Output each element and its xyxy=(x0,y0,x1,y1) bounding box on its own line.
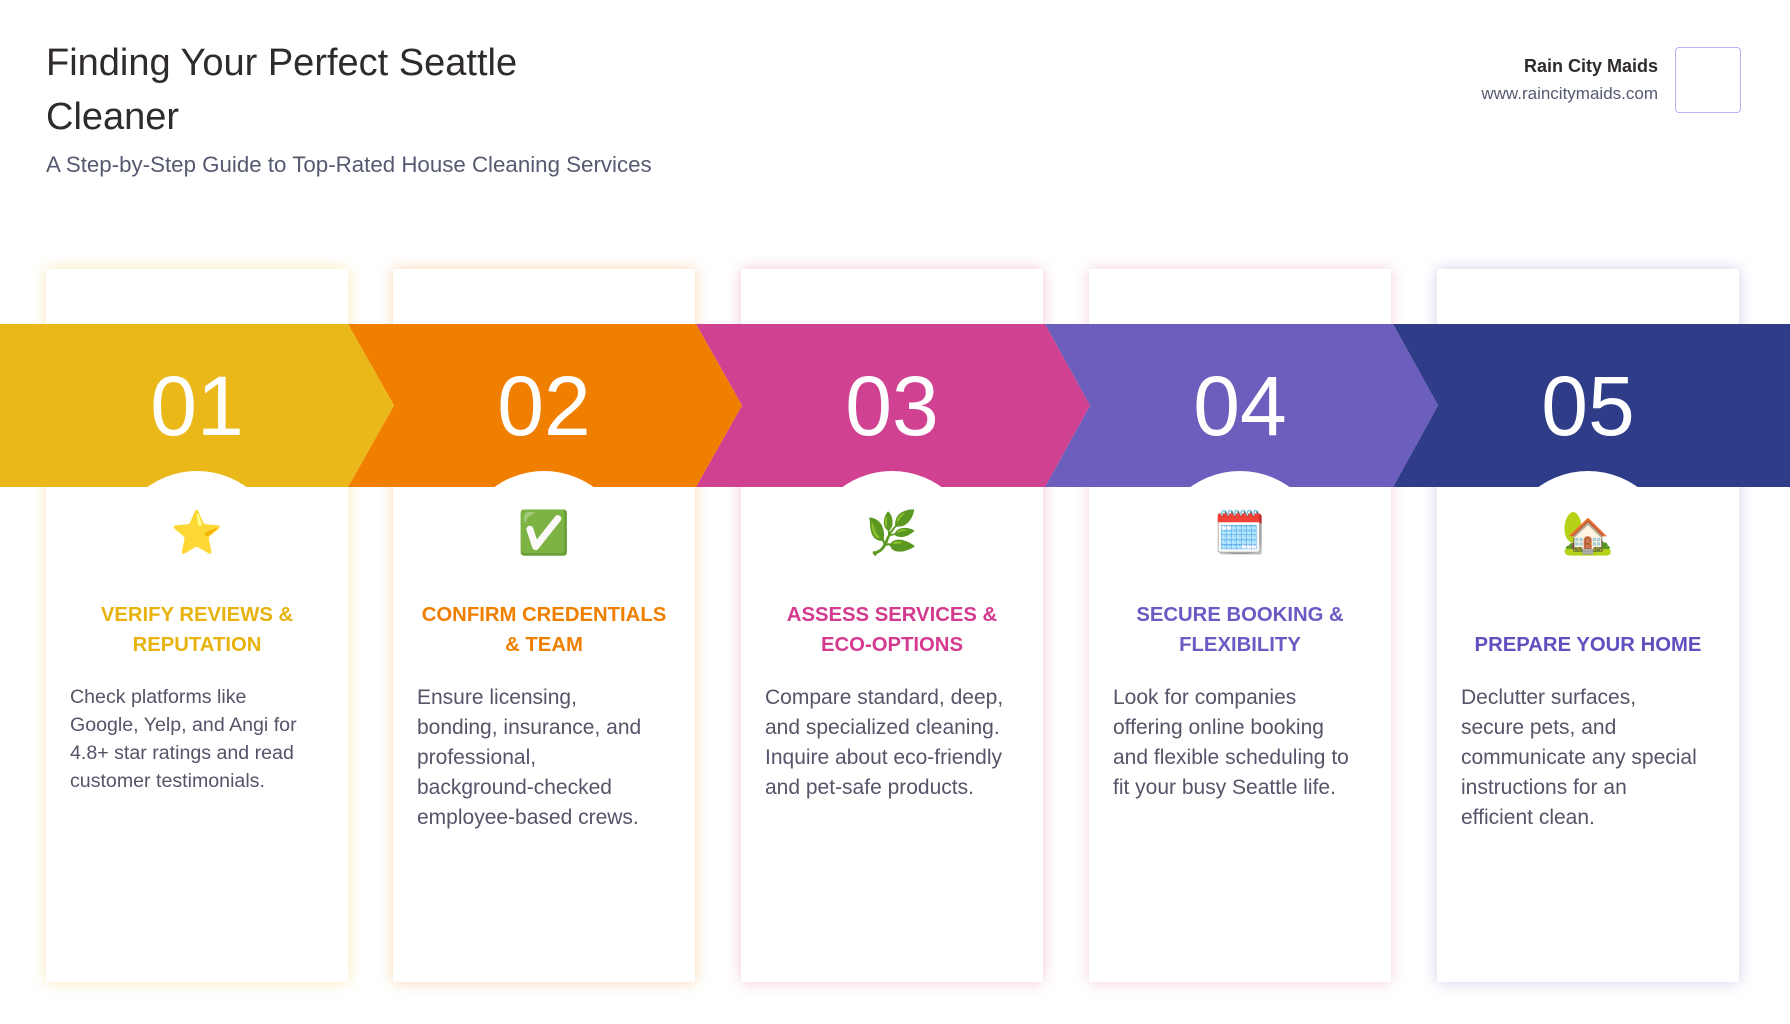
heading 3: ECO-OPTIONS xyxy=(821,634,963,656)
brand url: www.raincitymaids.com xyxy=(1481,84,1658,103)
brand name: Rain City Maids xyxy=(1524,56,1658,76)
title xyxy=(46,42,517,138)
text 4 xyxy=(1113,686,1349,799)
card 3 xyxy=(741,269,1043,982)
number 01: 01 xyxy=(150,359,244,453)
heading 4: FLEXIBILITY xyxy=(1179,634,1301,656)
chevron band xyxy=(0,324,1790,487)
logo box xyxy=(1675,47,1741,113)
text 5: communicate any special xyxy=(1461,746,1697,769)
text 5 xyxy=(1461,686,1697,829)
card 1 xyxy=(46,269,348,982)
heading 4: SECURE BOOKING & xyxy=(1136,604,1344,626)
heading 2 xyxy=(422,604,666,656)
text 3: Inquire about eco-friendly xyxy=(765,746,1002,769)
icon: calendar: 🗓️ xyxy=(1214,509,1266,558)
title: Finding Your Perfect Seattle xyxy=(46,42,517,84)
text 2 xyxy=(417,686,641,829)
text 1 xyxy=(70,686,297,792)
heading 1: VERIFY REVIEWS & xyxy=(101,604,293,626)
heading 5: PREPARE YOUR HOME xyxy=(1475,634,1701,656)
text 2: bonding, insurance, and xyxy=(417,716,641,739)
number 03: 03 xyxy=(845,359,939,453)
icon: house: 🏡 xyxy=(1562,509,1614,558)
text 2: background-checked xyxy=(417,776,612,799)
subtitle: A Step-by-Step Guide to Top-Rated House Cleaning Services xyxy=(46,152,652,177)
brand block xyxy=(1481,47,1741,113)
heading 4 xyxy=(1136,604,1344,656)
text 2: employee-based crews. xyxy=(417,806,639,829)
text 5: secure pets, and xyxy=(1461,716,1616,739)
text 1: Check platforms like xyxy=(70,686,246,708)
text 4: Look for companies xyxy=(1113,686,1296,709)
text 2: professional, xyxy=(417,746,536,769)
text 4: offering online booking xyxy=(1113,716,1324,739)
heading 3: ASSESS SERVICES & xyxy=(787,604,997,626)
card 4 xyxy=(1089,269,1391,982)
heading 2: & TEAM xyxy=(505,634,583,656)
text 3: and pet-safe products. xyxy=(765,776,974,799)
heading 3 xyxy=(787,604,997,656)
icon: check: ✅ xyxy=(518,509,570,558)
number 04: 04 xyxy=(1193,359,1287,453)
text 1: Google, Yelp, and Angi for xyxy=(70,714,297,736)
icon: star: ⭐ xyxy=(171,509,223,558)
text 2: Ensure licensing, xyxy=(417,686,577,709)
icon: herb: 🌿 xyxy=(866,509,918,558)
number 02: 02 xyxy=(497,359,591,453)
text 3: Compare standard, deep, xyxy=(765,686,1003,709)
text 4: fit your busy Seattle life. xyxy=(1113,776,1336,799)
text 5: instructions for an xyxy=(1461,776,1627,799)
text 1: customer testimonials. xyxy=(70,770,265,792)
text 1: 4.8+ star ratings and read xyxy=(70,742,294,764)
heading 1 xyxy=(101,604,293,656)
text 5: efficient clean. xyxy=(1461,806,1595,829)
text 4: and flexible scheduling to xyxy=(1113,746,1349,769)
card 2 xyxy=(393,269,695,982)
text 5: Declutter surfaces, xyxy=(1461,686,1636,709)
heading 1: REPUTATION xyxy=(133,634,261,656)
title: Cleaner xyxy=(46,96,179,138)
text 3: and specialized cleaning. xyxy=(765,716,1000,739)
text 3 xyxy=(765,686,1003,799)
card 5 xyxy=(1437,269,1739,982)
heading 2: CONFIRM CREDENTIALS xyxy=(422,604,666,626)
number 05: 05 xyxy=(1541,359,1635,453)
bumps xyxy=(112,471,282,641)
